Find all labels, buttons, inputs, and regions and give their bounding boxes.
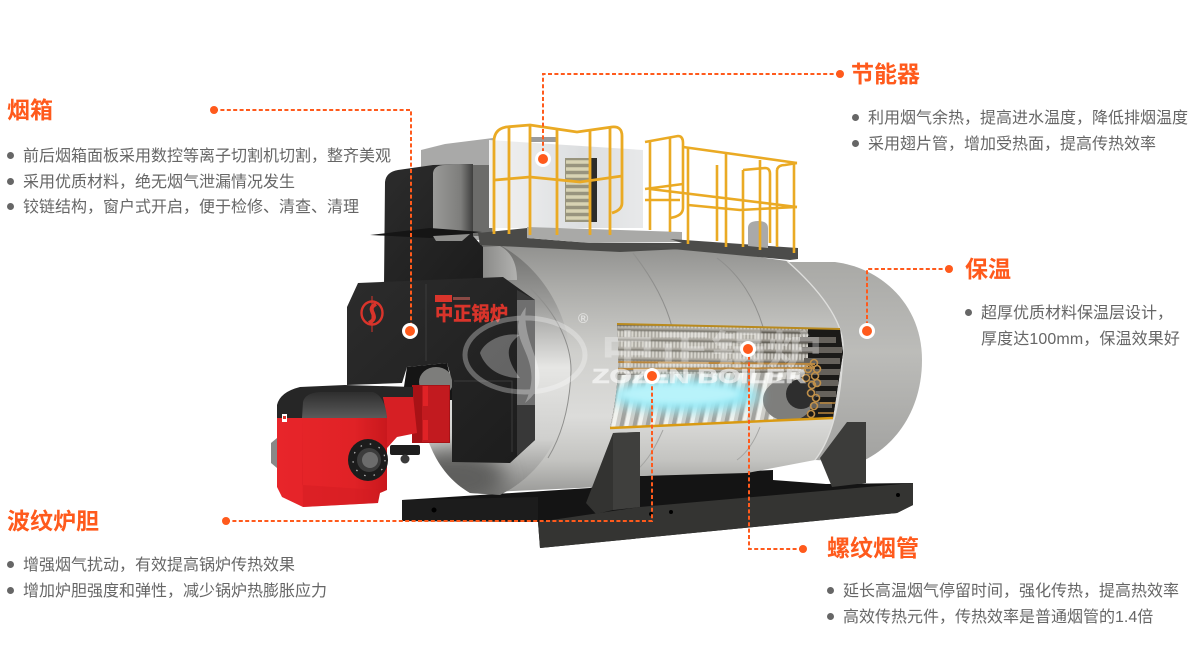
list: 烟箱 features: 前后烟箱面板采用数控等离子切割机切割，整齐美观 [23, 148, 391, 165]
economizer box [489, 137, 643, 228]
panel: 节能器 [851, 61, 1188, 153]
leader line: 保温 [859, 265, 953, 339]
panel: 螺纹烟管 [827, 535, 1179, 626]
heading: 螺纹烟管: 螺纹烟管 [827, 535, 919, 561]
brand logo [362, 296, 382, 332]
leader line: 螺纹烟管 [740, 341, 807, 553]
support legs [586, 422, 866, 514]
watermark brand text: ZOZEN BOILER [592, 366, 807, 388]
shell end cap [787, 262, 922, 462]
base frame [402, 470, 913, 548]
heading: 波纹炉胆: 波纹炉胆 [7, 508, 99, 534]
panel: 烟箱 [7, 97, 391, 216]
list: 节能器 features: 利用烟气余热，提高进水温度，降低排烟温度 [868, 110, 1188, 127]
brand name [435, 295, 508, 325]
list: 保温 features: 超厚优质材料保温层设计， [981, 305, 1173, 322]
brand name: 中正锅炉 [435, 303, 508, 325]
list: 烟箱 features: 采用优质材料，绝无烟气泄漏情况发生 [23, 174, 295, 191]
leader line: 烟箱 [210, 106, 418, 339]
heading: 烟箱: 烟箱 [7, 97, 53, 123]
list: 螺纹烟管 features [827, 582, 1179, 626]
top platform [478, 221, 798, 260]
panel: 保温 [965, 256, 1180, 348]
burner [271, 385, 450, 507]
list: 保温 features: 厚度达100mm，保温效果好 [981, 331, 1180, 348]
rear smoke box [370, 164, 517, 285]
heading: 保温: 保温 [965, 256, 1011, 282]
cutaway with tubes, furnace and flame [606, 324, 846, 430]
shell front cap [429, 245, 572, 495]
boiler shell [430, 238, 843, 493]
leader line: 节能器 [535, 70, 844, 167]
front smoke box panel [347, 277, 535, 463]
watermark brand text: 中正锅炉 [600, 329, 822, 373]
economizer back casing [421, 138, 493, 240]
boiler illustration with leader lines [210, 70, 953, 553]
leader line: 波纹炉胆 [222, 368, 660, 525]
list: 波纹炉胆 features: 增强烟气扰动，有效提高锅炉传热效果 [23, 557, 295, 574]
right yellow railing [645, 136, 797, 253]
list: 节能器 features: 采用翅片管，增加受热面，提高传热效率 [868, 136, 1156, 153]
watermark logo [465, 307, 585, 403]
heading: 节能器: 节能器 [851, 61, 920, 87]
left yellow railing [494, 125, 622, 235]
list: 波纹炉胆 features: 增加炉胆强度和弹性，减少锅炉热膨胀应力 [23, 583, 327, 600]
panel: 波纹炉胆 [7, 508, 327, 600]
list: 保温 features [965, 304, 1180, 348]
watermark brand text [578, 310, 822, 388]
list: 螺纹烟管 features: 高效传热元件，传热效率是普通烟管的1.4倍 [843, 609, 1153, 626]
list: 烟箱 features [7, 147, 391, 216]
list: 波纹炉胆 features [7, 556, 327, 600]
list: 烟箱 features: 铰链结构，窗户式开启，便于检修、清查、清理 [23, 199, 359, 216]
list: 螺纹烟管 features: 延长高温烟气停留时间，强化传热，提高热效率 [843, 583, 1179, 600]
list: 节能器 features [852, 109, 1188, 153]
watermark brand text: ® [578, 310, 589, 326]
